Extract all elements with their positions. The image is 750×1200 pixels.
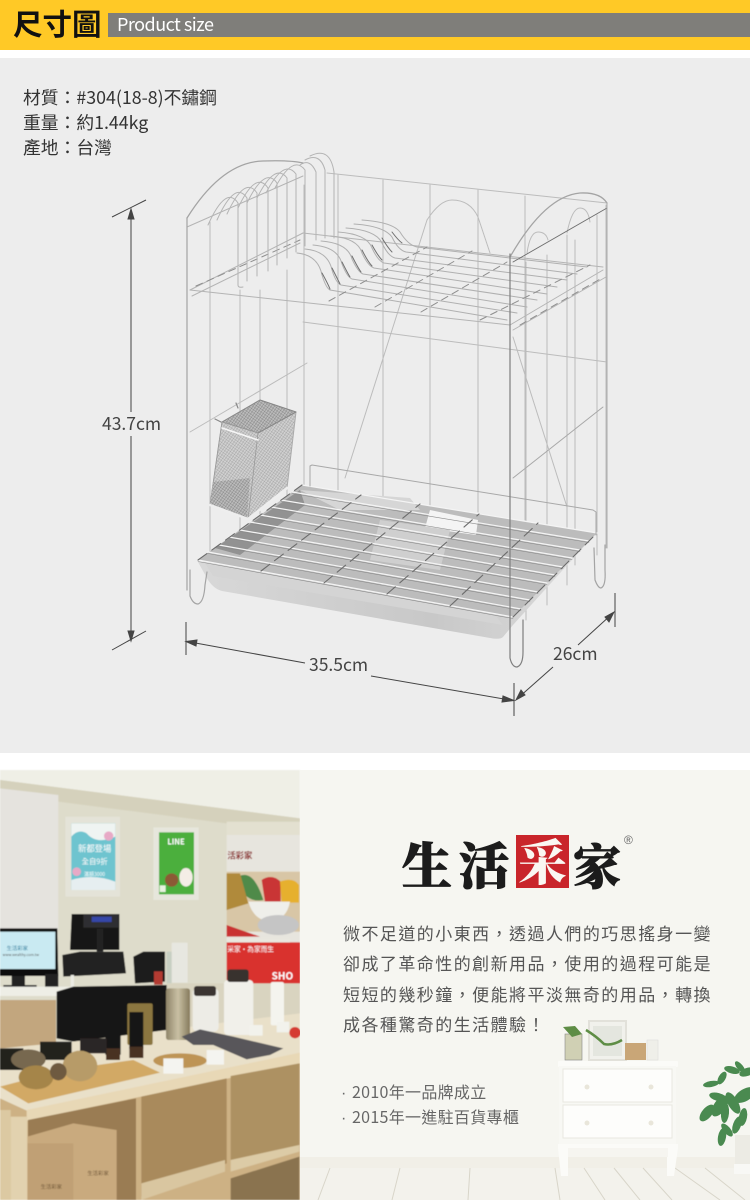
- white shelf and box at left: [0, 975, 74, 1048]
- brand logo: 活: [459, 827, 509, 899]
- tray grid: cross slats: [198, 485, 597, 617]
- dimension: depth 26cm: [516, 593, 615, 700]
- vertical plate dividers: [187, 153, 334, 287]
- specification text: [23, 84, 217, 160]
- poster: store promotion: 新都登場: [78, 843, 111, 855]
- poster: store promotion: 滿額3000: [84, 871, 105, 878]
- brand milestones: 2015年一進駐百貨專櫃: [352, 1104, 519, 1128]
- dimension: height 43.7cm: 43.7cm: [102, 411, 161, 436]
- dimension: height 43.7cm: [102, 200, 161, 650]
- specification text: 重量：約1.44kg: [23, 109, 148, 135]
- brand milestones: 2010年一品牌成立: [352, 1079, 487, 1103]
- back counter surface: [167, 983, 300, 1027]
- right top rail: [513, 208, 607, 262]
- header band: [0, 0, 750, 50]
- front left post: [186, 218, 188, 590]
- monitor: [0, 928, 58, 990]
- right front post and feet: [190, 203, 607, 667]
- wall banner: red kitchen poster: SHO: [272, 967, 293, 982]
- wall banner: red kitchen poster: 活彩家: [227, 849, 253, 861]
- brand logo: [402, 825, 633, 899]
- dimension: width 35.5cm: [186, 622, 514, 716]
- brand milestones: ·: [341, 1085, 347, 1102]
- tray grid: long wires: [198, 485, 597, 617]
- wooden cubby shelves: [0, 1053, 300, 1200]
- monitor: 生活彩家: [7, 944, 29, 952]
- poster: LINE promotion: LINE: [167, 837, 185, 848]
- specification text: 產地：台灣: [23, 134, 112, 160]
- wooden tray with bowls: [0, 1038, 160, 1103]
- brand milestones: [341, 1079, 519, 1128]
- brand logo: 采: [518, 825, 567, 895]
- brand milestones: ·: [341, 1110, 347, 1127]
- POS terminal: [62, 914, 188, 985]
- thermos products: [105, 969, 284, 1060]
- plate rack wires: [297, 220, 587, 320]
- left arch: [187, 161, 303, 218]
- decor: white dresser: [558, 1061, 678, 1176]
- poster: LINE promotion: [153, 827, 199, 900]
- dimension: width 35.5cm: 35.5cm: [309, 652, 368, 677]
- photo: retail store counter: [0, 770, 301, 1200]
- dark wave accents: [322, 232, 402, 289]
- knives and board: [153, 1022, 301, 1074]
- wooden cubby shelves: 生活彩家: [41, 1182, 63, 1190]
- black counter cabinet: [57, 985, 167, 1042]
- wall banner: red kitchen poster: 采家・為家而生: [227, 944, 274, 954]
- back bar of lower rack: [310, 465, 596, 535]
- brand description: 卻成了革命性的創新用品，使用的過程可能是: [343, 950, 712, 975]
- tray: [198, 485, 597, 639]
- brand description: 短短的幾秒鐘，便能將平淡無奇的用品，轉換: [343, 981, 712, 1006]
- product illustration: stainless dish rack: [187, 153, 607, 667]
- utensil basket: [210, 400, 296, 519]
- back frame and vertical wires: [190, 173, 607, 620]
- brand logo: 生: [402, 827, 452, 899]
- photo background wall: [0, 770, 300, 1200]
- shelf cross slats: [196, 240, 602, 325]
- panel: product dimensions: [0, 58, 750, 753]
- subheading bar: Product size: [108, 11, 750, 37]
- brand logo: ®: [624, 833, 633, 847]
- right arch: [510, 193, 607, 257]
- heading: 尺寸圖: 尺寸圖: [13, 2, 102, 44]
- specification text: 材質：#304(18-8)不鏽鋼: [23, 84, 217, 110]
- decor: items on dresser: [563, 1021, 658, 1060]
- poster: store promotion: [65, 817, 120, 897]
- brand description: 成各種驚奇的生活體驗！: [343, 1011, 546, 1036]
- countertop: [0, 1013, 300, 1111]
- monitor: www.wealthy.com.tw: [3, 953, 39, 958]
- wall banner: red kitchen poster: [227, 835, 300, 1013]
- upper plate shelf frame: [190, 233, 606, 330]
- brand description: 微不足道的小東西，透過人們的巧思搖身一變: [343, 920, 712, 945]
- wooden cubby shelves: 生活彩家: [87, 1169, 109, 1177]
- panel: brand introduction: [300, 770, 750, 1200]
- floor and baseboard: [300, 1157, 750, 1200]
- decor: potted plant: [697, 1060, 750, 1174]
- poster: store promotion: 全自9折: [82, 856, 108, 867]
- subheading bar: Product size: Product size: [117, 11, 214, 37]
- dimension: depth 26cm: 26cm: [553, 641, 598, 666]
- brand description: [343, 920, 712, 1036]
- brand logo: 家: [573, 829, 621, 898]
